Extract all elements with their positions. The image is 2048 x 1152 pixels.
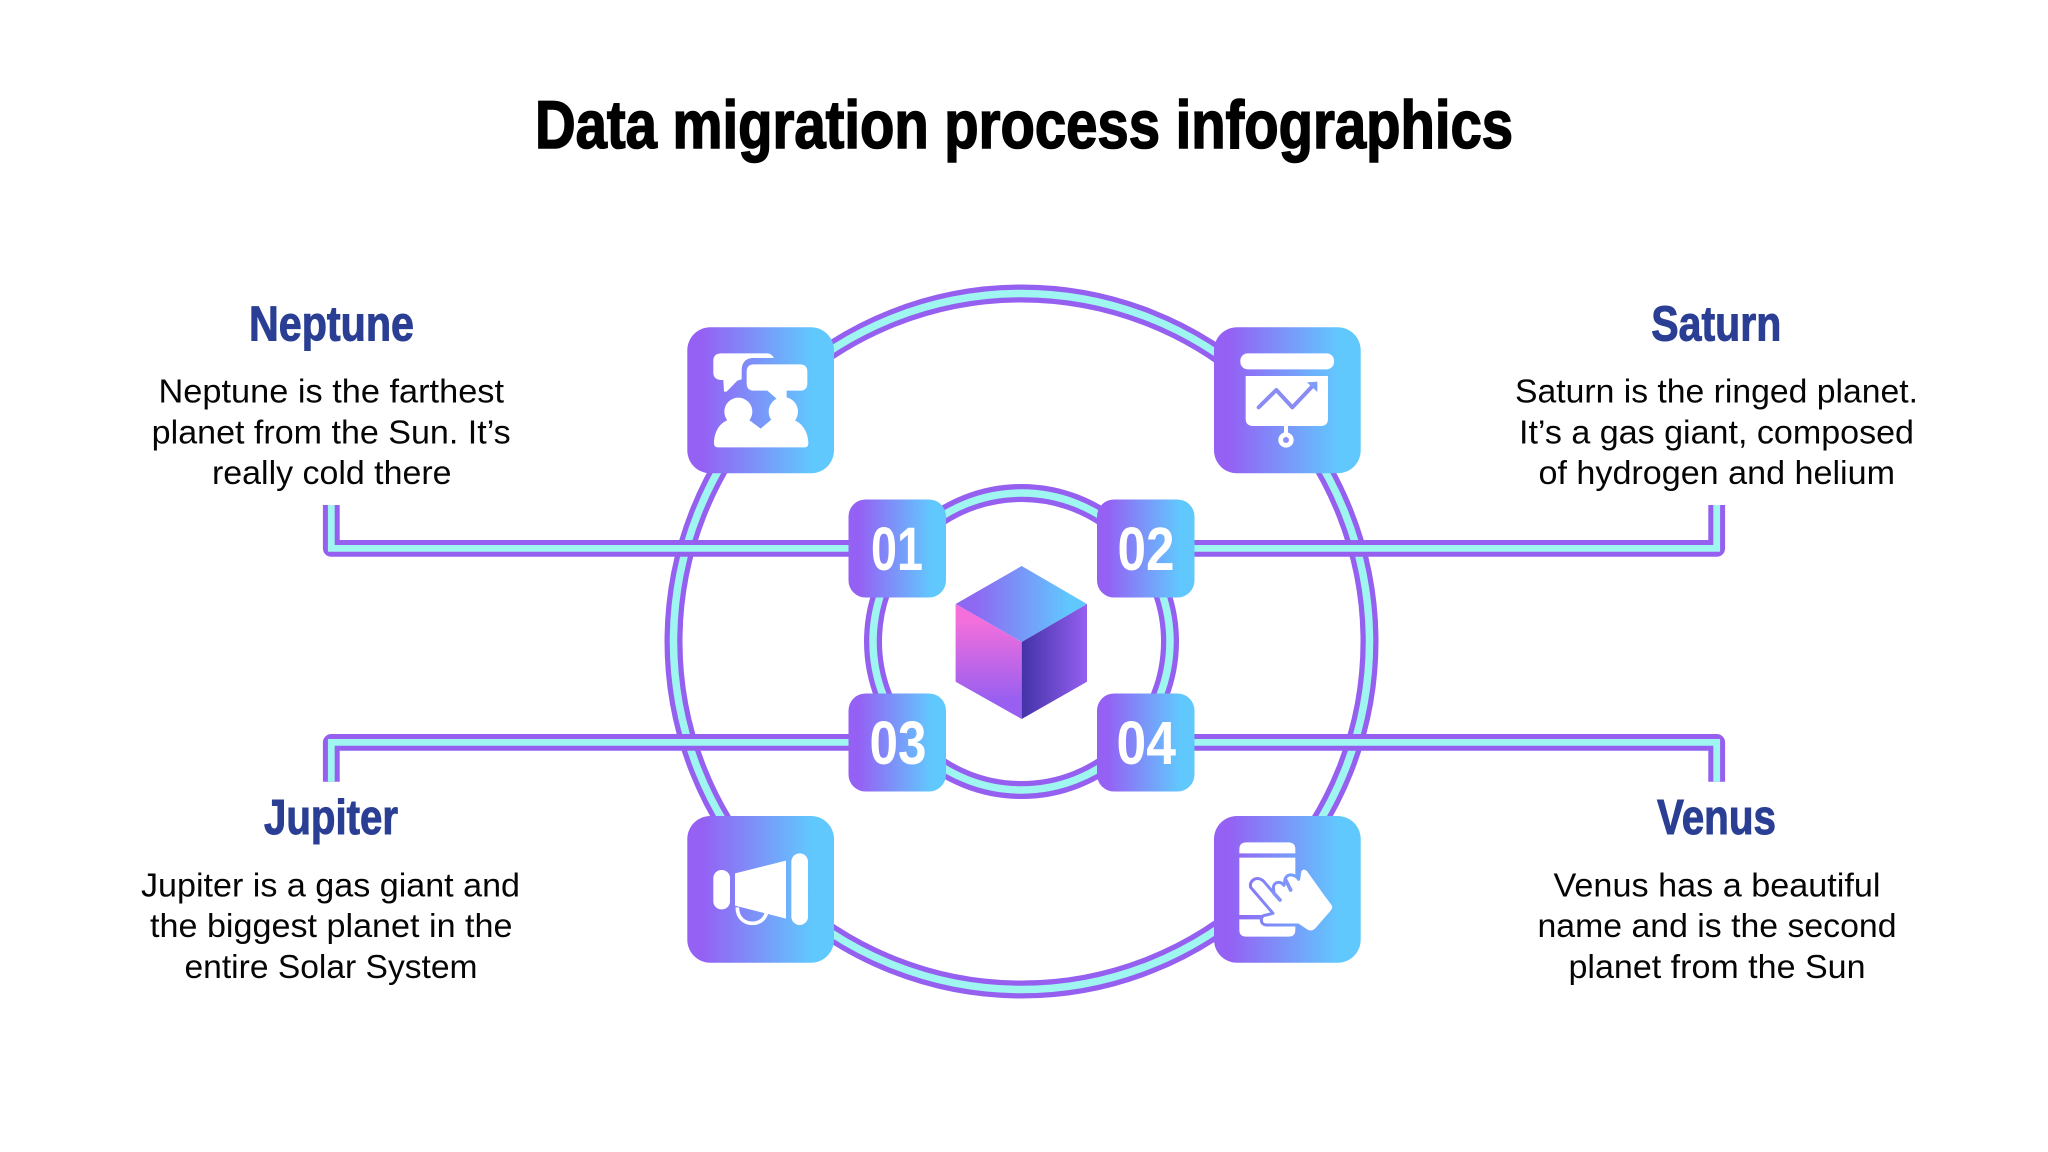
text: Jupiter description: Jupiter is a gas giant and: [141, 866, 520, 904]
icon tile: presentation board with rising chart: [1214, 327, 1361, 473]
connector: Saturn to 02: [1180, 505, 1717, 548]
heading: Jupiter: Jupiter: [264, 791, 398, 845]
badge 04: [1097, 694, 1194, 792]
heading: Saturn: Saturn: [1651, 298, 1781, 352]
text: Venus description: Venus has a beautiful: [1554, 866, 1880, 904]
text: Saturn description: of hydrogen and helium: [1538, 454, 1895, 491]
text: Saturn description: [1515, 373, 1918, 491]
icon tile: megaphone: [687, 816, 834, 963]
panel: Saturn: [1515, 298, 1918, 491]
panel: Jupiter: [141, 791, 520, 985]
connector: Neptune to 01: [331, 505, 860, 548]
icon tile: hand tapping smartphone: [1214, 816, 1361, 963]
text: Venus description: name and is the second: [1538, 907, 1896, 944]
text: Venus description: planet from the Sun: [1568, 948, 1866, 985]
text: Venus description: [1538, 866, 1896, 985]
badge 03: 03: [870, 709, 926, 777]
heading: Venus: Venus: [1657, 791, 1776, 845]
badge 04: 04: [1116, 709, 1176, 777]
text: Jupiter description: entire Solar System: [184, 948, 478, 985]
connector: Jupiter to 03: [331, 742, 860, 782]
text: Neptune description: really cold there: [212, 454, 452, 491]
badge 02: 02: [1118, 515, 1174, 583]
connector: Venus to 04: [1180, 742, 1717, 782]
outer ring: [674, 294, 1370, 990]
text: Neptune description: Neptune is the farthest: [158, 373, 504, 410]
badge 03: [848, 694, 946, 792]
badge 02: [1097, 500, 1194, 598]
text: Saturn description: Saturn is the ringed planet.: [1515, 373, 1918, 410]
panel: Neptune: [152, 298, 511, 491]
badge 01: [848, 500, 946, 598]
central cube icon: [956, 566, 1087, 719]
panel: Venus: [1538, 791, 1896, 985]
badge 01: 01: [871, 515, 923, 583]
inner ring: [873, 493, 1170, 790]
icon tile: chat between people: [687, 327, 834, 473]
title: Data migration process infographics: [535, 87, 1513, 163]
text: Saturn description: It’s a gas giant, composed: [1519, 413, 1914, 450]
text: Neptune description: planet from the Sun. It’s: [152, 413, 511, 450]
text: Jupiter description: [141, 866, 520, 985]
text: Neptune description: [152, 373, 511, 491]
text: Jupiter description: the biggest planet in the: [150, 907, 512, 944]
heading: Neptune: Neptune: [249, 298, 414, 352]
